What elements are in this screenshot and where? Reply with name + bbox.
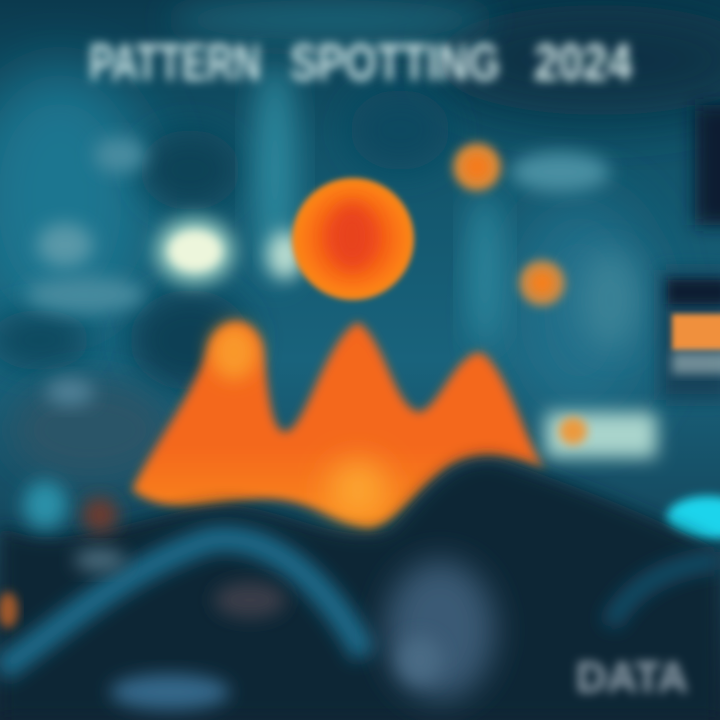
orange mountain chart (132, 322, 545, 530)
title: 2024 (534, 34, 632, 92)
small orange dot top (453, 143, 501, 191)
sun circle (292, 178, 414, 300)
title (89, 34, 632, 92)
dark foreground hills (0, 459, 720, 720)
title: PATTERN (89, 34, 261, 92)
footer label: DATA (576, 653, 688, 702)
right dark device (660, 105, 720, 400)
title: SPOTTING (290, 34, 500, 92)
cyan glow (666, 496, 720, 540)
pale panel right (545, 412, 657, 458)
glowing light left (155, 217, 303, 285)
small orange dot middle (519, 260, 565, 306)
